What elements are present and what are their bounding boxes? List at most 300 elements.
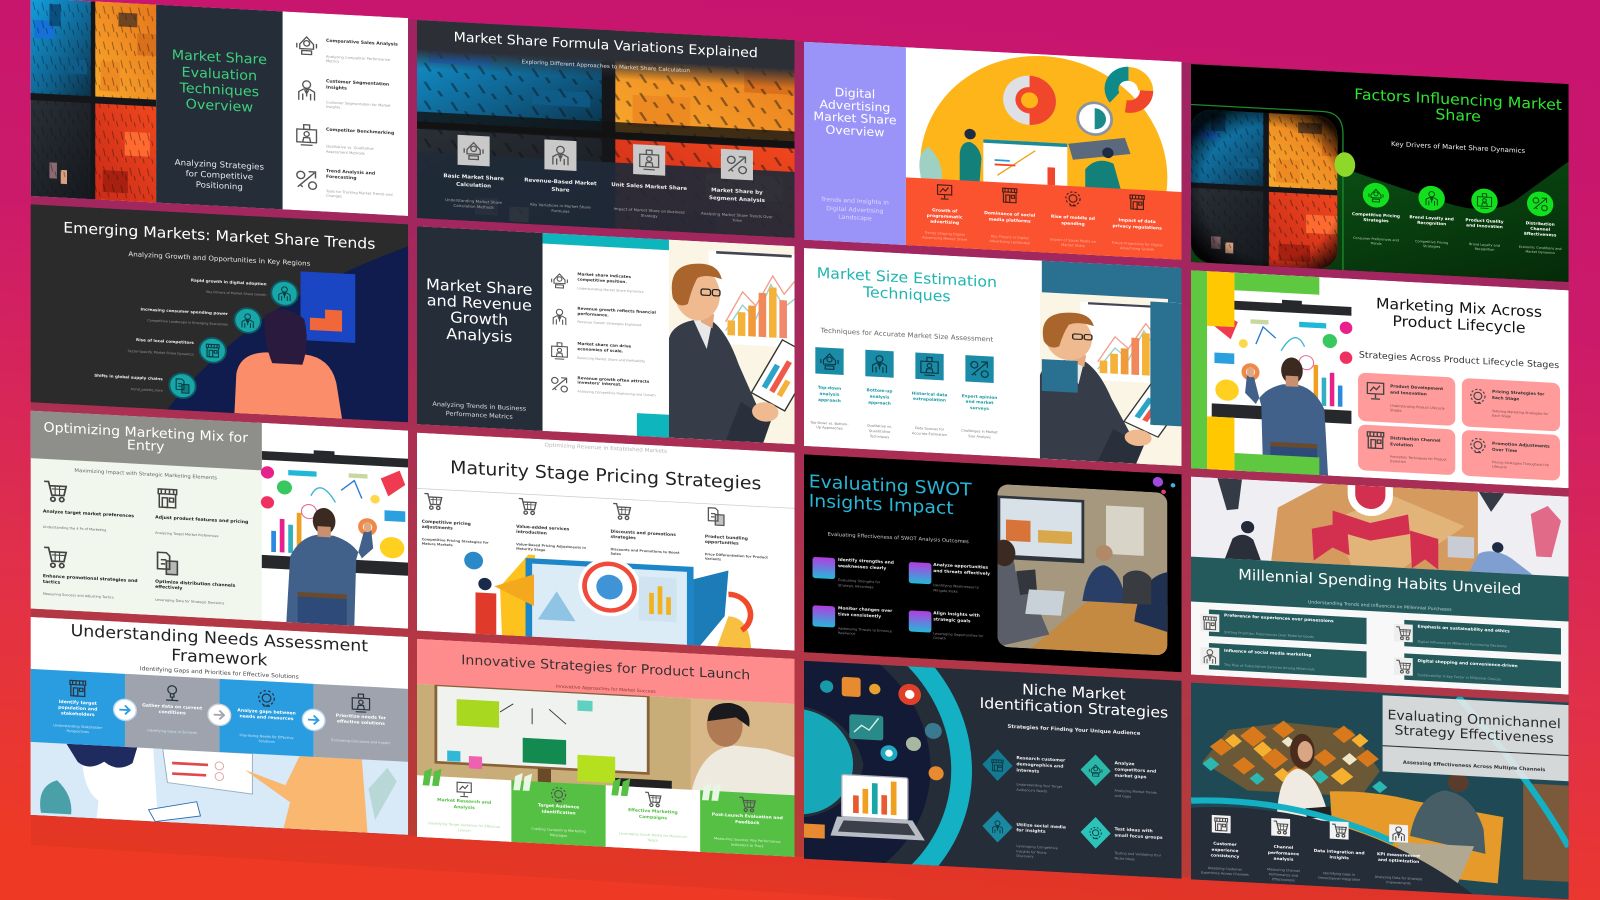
strategy descriptions: Audience's Needs — [1016, 788, 1047, 793]
habit labels: Influence of social media marketing — [1224, 648, 1311, 657]
subtitle: Analyzing Growth and Opportunities in Key Regions — [128, 250, 311, 268]
title: Market Size Estimation — [817, 264, 997, 291]
list descriptions: Balancing Market Share and Profitability — [577, 356, 645, 363]
step icons — [70, 679, 370, 712]
timeline labels — [94, 272, 267, 387]
insight descriptions: Addressing Threats to Enhance — [838, 627, 892, 633]
list descriptions: Understanding Market Share Dynamics — [577, 286, 644, 294]
list statements: competitive position. — [577, 277, 627, 284]
driver descriptions: Trends — [1369, 241, 1382, 246]
card: Emerging Markets: Market Share Trends — [31, 204, 408, 422]
soft shadow below the grid — [31, 815, 1569, 900]
insight labels: Identify strengths and — [838, 558, 894, 566]
timeline descriptions: Key Drivers of Market Share Growth — [206, 290, 267, 297]
step descriptions: Leveraging Social Media for Maximum — [619, 832, 687, 839]
illustration: analyst with tablet — [1040, 292, 1190, 466]
driver labels: Channel — [1530, 226, 1551, 232]
element descriptions: Analyzing Target Market Preferences — [155, 531, 219, 538]
step columns — [417, 775, 795, 857]
title: Overview — [825, 123, 885, 139]
card: Optimizing Marketing Mix for Entry — [31, 411, 408, 629]
timeline descriptions: Sector-Specific Market Share Dynamics — [128, 349, 194, 356]
diamond tiles — [982, 748, 1111, 849]
list labels: Trend Analysis and — [326, 169, 375, 177]
diamond icons — [992, 760, 1102, 839]
strategy labels: competitors and — [1114, 767, 1156, 775]
element labels: Adjust product features and pricing — [155, 515, 248, 525]
element labels — [43, 509, 248, 596]
title: Techniques — [179, 81, 259, 100]
technique descriptions: Quantitative — [869, 429, 890, 434]
title: Entry — [127, 438, 165, 455]
strategy descriptions: Each Stage — [1492, 414, 1511, 418]
pink strategy cards — [1358, 372, 1560, 481]
card: Market Share and Revenue Growth Analysis — [417, 226, 816, 445]
strategy descriptions: Competitive Pricing Strategies for — [422, 537, 489, 545]
habit icons — [1200, 614, 1413, 676]
strategy labels: Product bundling — [705, 535, 748, 542]
element descriptions — [43, 525, 225, 605]
network icons — [820, 676, 944, 781]
illustration: laptop with charts — [804, 772, 925, 844]
strategy labels: Value-added services — [516, 525, 569, 532]
panel: grey title band — [31, 411, 262, 470]
step descriptions: Indicators to Track — [731, 843, 764, 848]
list statements: investors' interest. — [577, 380, 622, 387]
list icons — [297, 36, 316, 190]
column labels: Basic Market Share — [443, 173, 504, 182]
driver labels: and Innovation — [1466, 223, 1503, 229]
element descriptions: Measuring Success and Adjusting Tactics — [43, 592, 114, 599]
column descriptions: Impact of Market Share on Business — [614, 206, 685, 215]
insight descriptions: Leveraging Opportunities for — [933, 632, 983, 638]
metric labels: and optimization — [1378, 857, 1419, 864]
step descriptions: Launch — [458, 828, 471, 833]
strategy descriptions: Value-Based Pricing Adjustments in — [516, 542, 586, 550]
image: quadrant market blocks — [417, 20, 802, 252]
column descriptions: Key Variations in Market Share — [530, 202, 591, 210]
green wave background — [1191, 162, 1568, 282]
step labels: conditions — [159, 709, 186, 716]
title: Maturity Stage Pricing Strategies — [450, 458, 761, 494]
list statements — [577, 271, 657, 389]
list labels: Comparative Sales Analysis — [326, 38, 398, 48]
list descriptions: Analyzing Competitive Positioning and Growth — [577, 389, 656, 397]
metric descriptions: Analyzing Data for Strategic — [1375, 875, 1422, 881]
technique labels: Historical data — [912, 391, 947, 397]
column descriptions: Understanding Market Share — [445, 197, 502, 205]
title: Factors Influencing Market — [1354, 86, 1562, 114]
list descriptions: Metrics — [326, 59, 339, 64]
step labels: Feedback — [735, 819, 760, 826]
insight descriptions: Mitigate Risks — [933, 588, 958, 594]
stat descriptions: Trends Shaping Digital — [925, 231, 965, 237]
step labels: Identify target — [59, 700, 97, 707]
illustration: analytics scene — [919, 56, 1168, 258]
strategy descriptions: Sales — [610, 552, 621, 556]
insight descriptions — [838, 578, 984, 643]
technique labels: extrapolation — [913, 396, 946, 403]
driver labels: Effectiveness — [1524, 231, 1557, 237]
step descriptions: Understanding Stakeholder — [53, 723, 102, 730]
driver labels: Brand Loyalty and — [1409, 214, 1454, 221]
element labels: effectively — [155, 584, 183, 591]
habit labels — [1224, 613, 1518, 668]
card: Innovative Strategies for Product Launch — [417, 639, 795, 857]
header band — [417, 20, 795, 88]
image: quadrant market blocks — [31, 0, 156, 203]
step labels: Post-Launch Evaluation and — [712, 813, 783, 821]
card: Maturity Stage Pricing Strategies — [417, 433, 795, 651]
title: Market Share Formula Variations Explained — [454, 30, 758, 61]
teal swooshes — [1191, 682, 1568, 851]
driver labels: Competitive Pricing — [1352, 211, 1400, 219]
column labels: Revenue-Based Market — [524, 178, 597, 187]
list descriptions — [577, 286, 656, 397]
subtitle: Strategies Across Product Lifecycle Stages — [1359, 351, 1559, 371]
habit descriptions — [1223, 629, 1507, 682]
woman viewing screen — [234, 307, 342, 419]
metric labels: insights — [1329, 854, 1349, 860]
tile icons — [821, 352, 988, 378]
strategy descriptions: Price Differentiation for Product — [705, 552, 768, 560]
list statements: Market share can drive — [577, 341, 631, 349]
card: Evaluating Omnichannel Strategy Effectiveness — [1191, 682, 1568, 899]
strategy descriptions: Tailoring Marketing Strategies for — [1492, 409, 1548, 416]
strategy labels: Promotion Adjustments — [1492, 441, 1550, 449]
step descriptions: Identifying Target Audience for Effective — [428, 821, 500, 829]
green frame — [1191, 104, 1343, 270]
step labels: Prioritize needs for — [336, 714, 386, 721]
insight descriptions: Resilience — [838, 631, 855, 636]
strategy labels: Over Time — [1492, 447, 1517, 453]
metric descriptions: Performance and — [1269, 872, 1298, 878]
photo: team meeting — [993, 484, 1167, 656]
subtitle: Exploring Different Approaches to Market Share Calculation — [522, 60, 690, 74]
navy backdrop curve — [167, 234, 408, 422]
driver descriptions: Strategies — [1423, 244, 1441, 249]
step labels: Analyze gaps between — [237, 709, 296, 716]
strategy labels: interests — [1016, 768, 1040, 775]
subtitle: Key Drivers of Market Share Dynamics — [1391, 140, 1526, 155]
teal-blue backdrop — [1042, 261, 1182, 303]
stat labels: media platforms — [989, 217, 1031, 225]
timeline icons — [176, 281, 290, 399]
column descriptions: Formulas — [551, 208, 569, 214]
strategy descriptions: Maturity Stage — [516, 547, 546, 552]
step labels: Campaigns — [639, 814, 667, 821]
step descriptions: Evaluating Outcomes and Impact — [331, 738, 391, 745]
stat labels: privacy regulations — [1112, 223, 1162, 232]
illustration: analyst with tablet — [669, 240, 816, 445]
illustration: presenter at whiteboard — [1212, 271, 1352, 477]
strategy descriptions: Variants — [705, 557, 721, 561]
technique descriptions: Up Approaches — [816, 425, 843, 431]
technique descriptions: Accurate Estimation — [912, 431, 947, 437]
title: and Revenue — [427, 292, 532, 315]
step descriptions: Reach — [647, 838, 658, 843]
strategy descriptions: Insights for Niche — [1016, 849, 1047, 855]
list descriptions: Analyzing Competitor Performance — [326, 55, 390, 62]
subtitle: Identifying Gaps and Priorities for Effective Solutions — [140, 666, 299, 681]
column labels: Market Share by — [711, 187, 763, 196]
subtitle: for Competitive — [186, 168, 253, 182]
stat descriptions: Advertising Market Share — [922, 236, 967, 242]
driver icons — [1369, 188, 1547, 212]
strategy labels: Research customer — [1016, 756, 1065, 764]
stat labels: Rise of mobile ad — [1051, 215, 1095, 222]
metric descriptions: Omnichannel Integration — [1318, 876, 1360, 882]
technique labels: Bottom-up — [867, 387, 892, 394]
strategy descriptions: Lifecycle — [1492, 465, 1507, 469]
strategy descriptions: Understanding Your Target — [1016, 783, 1062, 789]
metric labels: performance — [1268, 850, 1299, 856]
stat descriptions: Impact of Social Media on — [1050, 238, 1096, 244]
technique labels: Top-down — [818, 385, 841, 391]
insight descriptions: Evaluating Strengths for — [838, 578, 880, 584]
tile icons — [464, 140, 746, 175]
subtitle: Digital Advertising — [826, 205, 884, 215]
strategy labels: opportunities — [705, 539, 739, 547]
step labels: stakeholders — [61, 711, 95, 718]
habit descriptions: The Rise of Subscription Services Among Millennials — [1223, 663, 1315, 672]
metric icons — [1212, 815, 1408, 843]
column descriptions — [446, 198, 773, 222]
illustration: parcel and shoppers — [1191, 477, 1568, 577]
technique descriptions: Qualitative vs. — [867, 424, 892, 429]
list descriptions: Tools for Tracking Market Trends and — [326, 189, 393, 197]
technique labels: surveys — [970, 405, 990, 411]
stat labels: Dominance of social — [984, 211, 1035, 219]
strategy descriptions: Discovery — [1016, 854, 1034, 859]
step descriptions — [428, 821, 781, 849]
step descriptions: Measuring Success: Key Performance — [714, 837, 781, 844]
timeline labels: Shifts in global supply chains — [94, 373, 163, 381]
title: Product Lifecycle — [1393, 312, 1526, 337]
subtitle: Trends and Insights in — [821, 196, 889, 207]
habit labels: Digital shopping and convenience-driven — [1418, 658, 1518, 668]
subtitle: Innovative Approaches for Market Success — [556, 684, 656, 695]
title: Digital — [835, 86, 875, 101]
card: Millennial Spending Habits Unveiled — [1191, 477, 1568, 695]
technique tiles — [815, 347, 994, 383]
green and yellow frame — [1191, 270, 1319, 475]
card: Market Share Evaluation Techniques Overview — [31, 0, 408, 216]
list descriptions — [325, 55, 393, 201]
list statements: performance. — [577, 311, 609, 318]
habit labels: Emphasis on sustainability and ethics — [1418, 624, 1510, 634]
title: Innovative Strategies for Product Launch — [461, 653, 750, 683]
icon tiles — [458, 135, 753, 180]
metric descriptions — [1201, 864, 1423, 889]
card: Marketing Mix Across Product Lifecycle — [1191, 270, 1568, 488]
strategy labels: Test ideas with — [1114, 827, 1153, 834]
title: Overview — [186, 97, 253, 116]
element icons — [44, 481, 177, 575]
technique descriptions — [809, 421, 998, 445]
driver descriptions: Consumer Preferences and — [1353, 236, 1399, 242]
strategy labels — [1390, 383, 1550, 455]
stat descriptions: Future Projections for Digital — [1112, 241, 1163, 247]
title: Framework — [171, 645, 268, 669]
panel: dark title panel — [156, 5, 283, 209]
stat labels: advertising — [930, 219, 959, 226]
stat labels: Growth of — [932, 208, 957, 215]
stat descriptions: Advertising Landscape — [989, 239, 1030, 245]
strategy labels: Utilize social media — [1016, 823, 1066, 831]
list statements: economies of scale. — [577, 346, 624, 354]
stat labels: Impact of data — [1119, 218, 1156, 225]
habit labels: Preference for experiences over possessions — [1224, 613, 1334, 623]
metric labels: Data integration and — [1314, 848, 1365, 855]
list descriptions: Revenue Growth Strategies Explained — [577, 320, 641, 327]
step labels: Target Audience — [538, 803, 579, 810]
teal top strip — [543, 233, 669, 250]
technique labels: approach — [868, 400, 891, 406]
list descriptions: Assessment Methods — [326, 150, 365, 156]
list labels: Competitor Benchmarking — [326, 127, 394, 136]
gradient icons — [812, 557, 931, 633]
list descriptions: Customer Segmentation for Market — [326, 101, 391, 108]
card: Understanding Needs Assessment Framework — [31, 617, 408, 835]
step descriptions: Identifying Gaps in Services — [147, 728, 197, 735]
technique labels: and market — [966, 399, 994, 405]
title: Market Share — [426, 276, 533, 299]
step descriptions: Prioritizing Needs for Effective — [240, 733, 294, 740]
driver descriptions: Competitive Pricing — [1415, 239, 1448, 245]
illustration: presenter at whiteboard — [261, 423, 408, 629]
metric labels: analysis — [1274, 856, 1294, 862]
decorative dots — [1153, 477, 1175, 495]
subtitle: Strategies for Finding Your Unique Audience — [1008, 724, 1141, 737]
driver labels: Recognition — [1417, 220, 1446, 226]
subtitle: Maximizing Impact with Strategic Marketing Elements — [74, 468, 217, 481]
dark horizon band — [417, 112, 794, 142]
title: Millennial Spending Habits Unveiled — [1238, 566, 1521, 598]
lower overlay — [417, 152, 795, 238]
metric labels — [1211, 841, 1420, 868]
list descriptions: Qualitative vs. Qualitative — [326, 145, 374, 151]
card: Evaluating SWOT Insights Impact — [804, 454, 1182, 672]
card: Market Size Estimation Techniques — [804, 248, 1190, 466]
overlay blocks — [1042, 296, 1182, 426]
panel divider — [1383, 745, 1568, 756]
strategy descriptions: Leveraging Competitive — [1016, 844, 1058, 850]
timeline descriptions: Competitive Landscape in Emerging Economies — [147, 318, 228, 327]
strategy icons — [424, 493, 724, 525]
technique labels: analysis — [820, 391, 840, 397]
driver descriptions: Economic Conditions and — [1519, 245, 1562, 251]
habit bars — [1209, 610, 1561, 688]
insight labels: Monitor changes over — [838, 606, 892, 614]
teal corner block — [637, 413, 669, 438]
title: Techniques — [862, 283, 951, 305]
driver descriptions: Brand Loyalty and — [1469, 242, 1500, 248]
element labels: Analyze target market preferences — [43, 509, 134, 519]
step descriptions: Perspectives — [67, 729, 89, 734]
card: Factors Influencing Market Share — [1187, 64, 1568, 282]
insight labels: time consistently — [838, 612, 881, 620]
column labels — [443, 173, 765, 204]
title: Optimizing Marketing Mix for — [43, 420, 248, 446]
photo: planning whiteboard and man — [417, 684, 795, 801]
card: Niche Market Identification Strategies — [804, 661, 1182, 879]
step labels: Effective Marketing — [628, 808, 678, 816]
strategy descriptions — [422, 537, 768, 564]
strategy labels: Analyze — [1114, 761, 1134, 767]
strategy labels: demographics and — [1016, 761, 1063, 770]
strategy descriptions — [1390, 404, 1549, 472]
insight labels: Analyze opportunities — [933, 563, 988, 571]
step labels: population and — [58, 705, 97, 713]
list statements: Revenue growth often attracts — [577, 375, 649, 384]
step labels: Analysis — [454, 804, 475, 811]
insight descriptions: Strategic Advantage — [838, 583, 874, 589]
green accent ball — [1334, 152, 1355, 177]
step labels: Gather data on current — [142, 704, 202, 712]
habit descriptions: Digital Influence on Millennial Purchasing Decisions — [1418, 640, 1507, 648]
strategy labels: market gaps — [1114, 773, 1147, 780]
timeline labels: Increasing consumer spending power — [140, 307, 228, 316]
process band — [31, 669, 408, 762]
insight descriptions: Identifying Weaknesses to — [933, 583, 979, 589]
element descriptions: Leveraging Data for Strategic Decisions — [155, 598, 225, 605]
title: Strategy Effectiveness — [1394, 723, 1554, 747]
driver labels: Product Quality — [1465, 217, 1504, 224]
strategy descriptions: Pricing Strategies Throughout the — [1492, 460, 1549, 467]
strategy labels: Competitive pricing — [422, 520, 471, 527]
column labels: Calculation — [456, 182, 491, 190]
list descriptions: Insights — [326, 105, 340, 110]
metric labels: Channel — [1274, 844, 1293, 850]
strategy descriptions: Mature Markets — [422, 542, 453, 547]
stat descriptions: Advertising Growth — [1120, 246, 1154, 252]
insight labels — [838, 557, 990, 625]
list descriptions: Changes — [326, 194, 342, 199]
insight descriptions: Growth — [933, 636, 946, 641]
illustration background — [1042, 296, 1182, 466]
strategy labels — [1016, 755, 1163, 841]
column descriptions: Time — [731, 218, 742, 223]
title: Advertising — [820, 97, 890, 115]
metric descriptions: Measuring Channel — [1267, 867, 1300, 873]
metric labels: Customer — [1213, 841, 1237, 847]
metric descriptions: Experience Across Channels — [1201, 870, 1249, 877]
title: Analysis — [446, 325, 512, 346]
title: Evaluating Omnichannel — [1387, 708, 1561, 732]
step labels: Identification — [542, 809, 576, 816]
driver labels: Strategies — [1363, 217, 1389, 223]
panel: title box — [1383, 695, 1568, 781]
subtitle: Positioning — [196, 179, 243, 192]
illustration: target dashboard and megaphone — [464, 550, 751, 648]
metric descriptions: Identifying Gaps in — [1323, 871, 1355, 877]
driver descriptions — [1353, 236, 1562, 255]
divider — [417, 488, 795, 509]
list labels: Customer Segmentation — [326, 79, 389, 88]
column descriptions: Strategy — [641, 213, 658, 219]
panel: teal title band — [1191, 557, 1568, 622]
strategy descriptions: Analyzing Market Trends — [1114, 789, 1157, 795]
insight labels: strategic goals — [933, 617, 971, 624]
screen with step chart — [301, 271, 355, 343]
strategy descriptions: Stages — [1390, 408, 1402, 413]
step descriptions: Crafting Compelling Marketing — [531, 827, 586, 834]
column descriptions: Calculation Methods — [454, 203, 494, 210]
stat descriptions: Key Players in Digital — [991, 234, 1029, 240]
driver descriptions: Recognition — [1475, 247, 1494, 252]
timeline labels: Rise of local competitors — [136, 337, 195, 345]
